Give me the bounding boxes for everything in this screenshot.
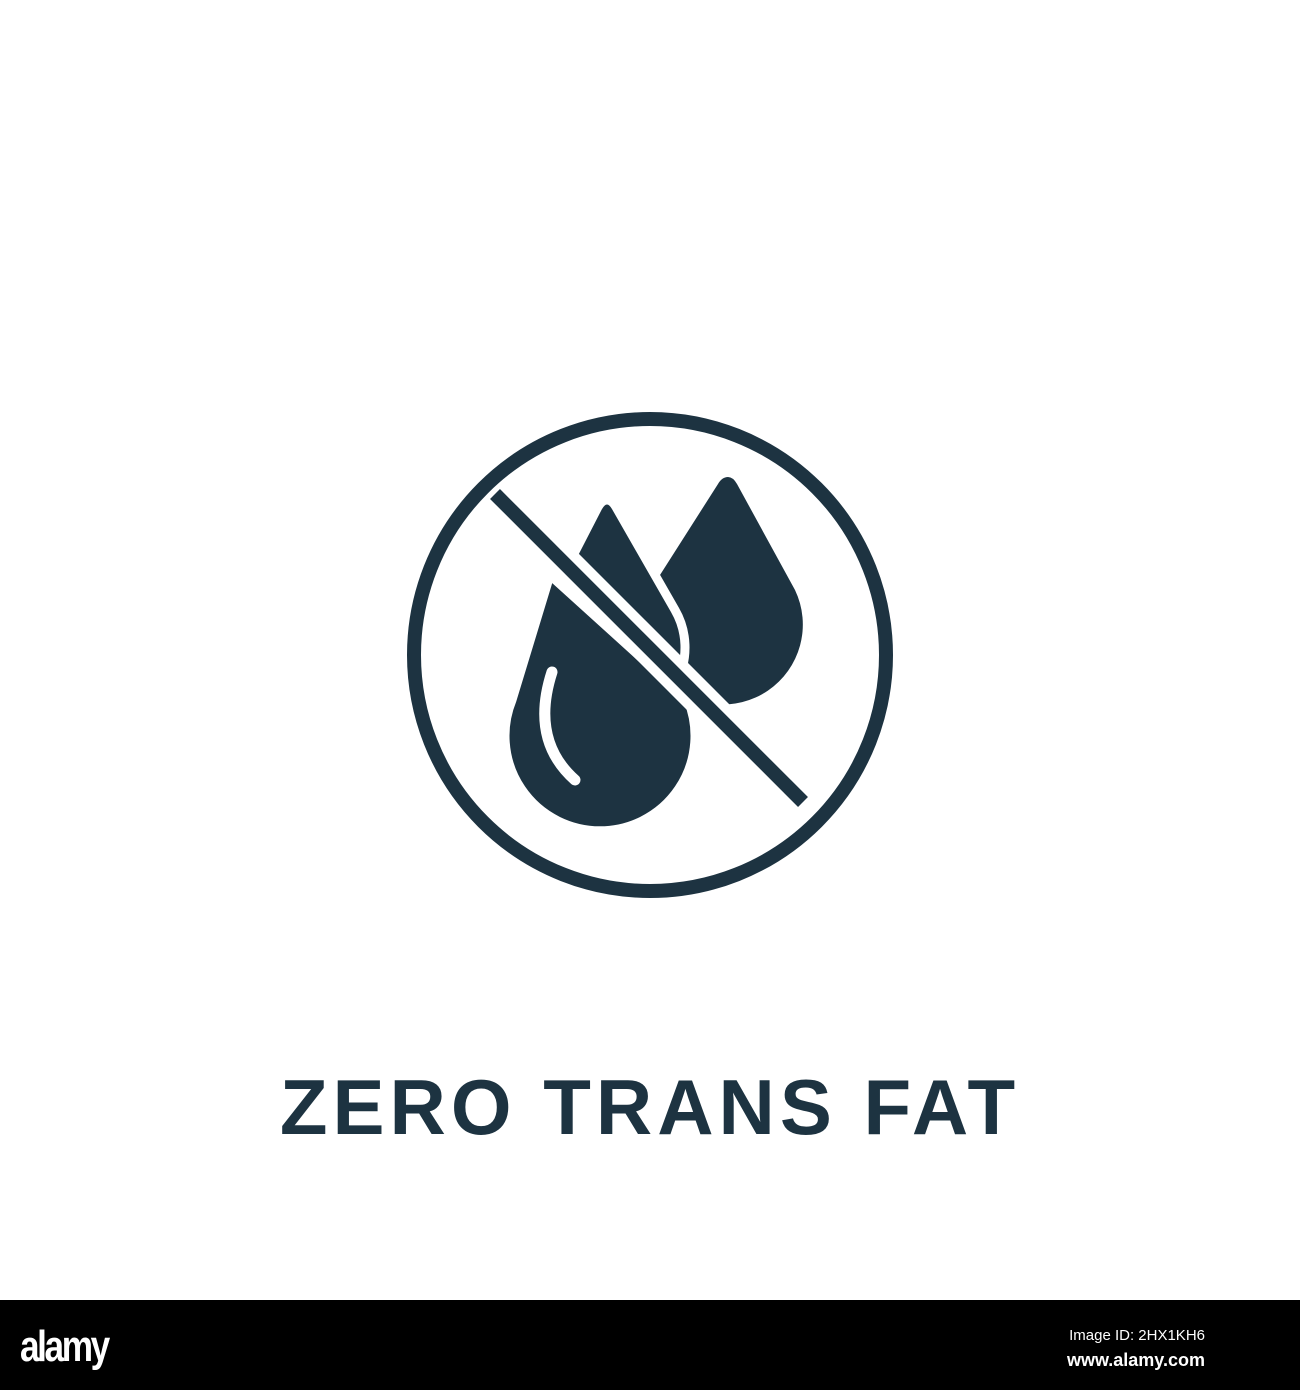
circle outline [414, 419, 886, 891]
footer image id: Image ID: 2HX1KH6 [1069, 1327, 1205, 1344]
footer logo: alamy [20, 1322, 108, 1371]
title: ZERO TRANS FAT [280, 1063, 1020, 1151]
drop: middle [535, 500, 685, 722]
slash gap [495, 494, 803, 802]
footer image id [1067, 1327, 1205, 1370]
footer bar [0, 1300, 1300, 1390]
slash [495, 494, 803, 802]
drop: right [643, 477, 803, 705]
drop: left [505, 575, 695, 831]
icon: zero trans fat (crossed-out drops in circle) [407, 412, 893, 898]
footer image id: www.alamy.com [1067, 1350, 1205, 1370]
drop highlight [545, 672, 575, 780]
